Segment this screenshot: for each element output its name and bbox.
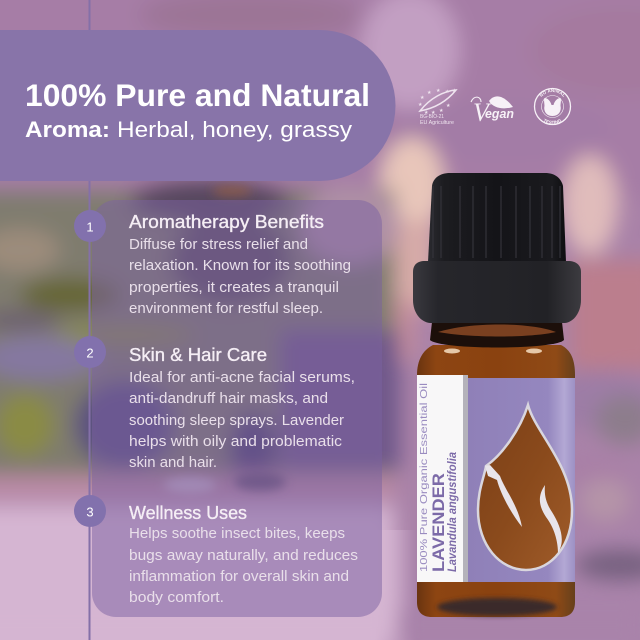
text block: wellness: bugs away naturally, and reduces [129,548,358,564]
icon: oil drop [478,405,572,570]
icon: EU organic leaf: ★ [446,103,451,109]
cap ribs [433,186,560,258]
neck ring [430,322,564,348]
icon: EU organic leaf: EU Agriculture [420,120,454,126]
step 2 [74,336,355,471]
step 3 [74,495,358,606]
label text: 100% Pure Organic Essential Oil [419,383,430,572]
bottle [413,173,581,617]
aroma line: Aroma: [25,117,110,142]
icon: EU organic leaf: ★ [427,90,432,96]
text block: wellness: body comfort. [129,590,224,606]
number badge 2 [74,336,106,368]
title: 100% Pure and Natural [25,77,370,113]
cap [428,173,566,262]
icon: vegan mark: egan [485,107,514,121]
icon: EU organic leaf: ★ [436,88,441,94]
icon: EU organic leaf: ★ [424,110,429,116]
cap collar [413,261,581,323]
number badge 1: 1 [86,220,94,234]
text block: aromatherapy: environment for restful sleep. [129,301,323,317]
text block: aromatherapy: relaxation. Known for its soothing [129,258,351,274]
heading: wellness uses: Wellness Uses [129,503,247,523]
text block: skin and hair: helps with oily and problematic [129,434,342,450]
text block: wellness [129,526,358,606]
text block: skin and hair: anti-dandruff hair masks, and [129,391,328,407]
icon: no animal testing [534,88,572,126]
heading: skin and hair care: Skin & Hair Care [129,345,267,365]
panel: benefits card [92,200,382,617]
aroma line [25,117,352,142]
text block: skin and hair: soothing sleep sprays. Lavender [129,413,344,429]
panel: title banner [0,30,396,181]
aroma line: Herbal, honey, grassy [117,117,352,142]
vertical timeline line [88,0,90,640]
text block: wellness: inflammation for overall skin and [129,569,349,585]
icon: EU organic leaf [418,88,457,126]
icon: EU organic leaf: BG-BIO-21 [420,114,444,120]
label text [419,383,459,572]
icon: no animal testing: NO ANIMAL [540,89,564,98]
text block: aromatherapy: properties, it creates a tranquil [129,280,339,296]
icon: no animal testing: TESTING [544,118,562,124]
text block: aromatherapy [129,237,351,317]
icon: vegan mark: V [473,98,492,127]
label text: LAVENDER [430,473,448,572]
text block: skin and hair: skin and hair. [129,455,217,471]
text block: aromatherapy: Diffuse for stress relief and [129,237,308,253]
icon: EU organic leaf: ★ [431,110,436,116]
white label strip [417,375,463,582]
icon: EU organic leaf: ★ [420,95,425,101]
icon: vegan mark [471,96,514,127]
label text: Lavandula angustifolia [447,451,459,572]
text block: skin and hair [129,370,355,471]
text block: wellness: Helps soothe insect bites, keeps [129,526,345,542]
step 1 [74,210,351,317]
number badge 3 [74,495,106,527]
icon: EU organic leaf: ★ [418,102,423,108]
number badge 3: 3 [86,504,94,520]
number badge 1 [74,210,106,242]
number badge 2: 2 [86,346,94,360]
icon: EU organic leaf: ★ [452,88,457,94]
icon: EU organic leaf: ★ [445,89,450,95]
heading: aromatherapy benefits: Aromatherapy Benefits [129,212,324,232]
bottle glass [417,345,575,617]
purple label [468,378,575,582]
text block: skin and hair: Ideal for anti-acne facial serums, [129,370,355,386]
icon: EU organic leaf: ★ [439,108,444,114]
